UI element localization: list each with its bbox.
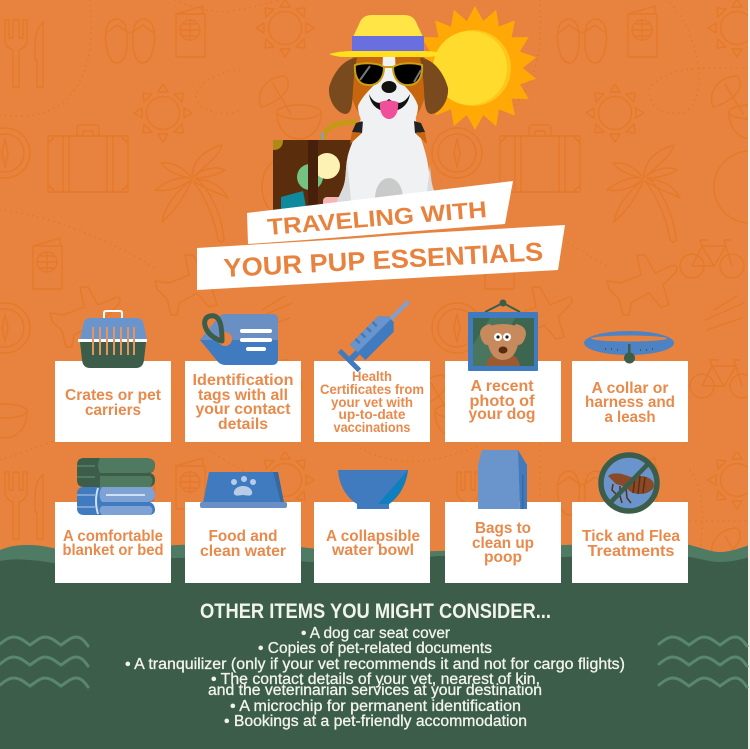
waves left bbox=[0, 637, 88, 687]
text: A collar or bbox=[592, 380, 668, 397]
panel: recent photo bbox=[445, 300, 561, 442]
panel: food and water bbox=[185, 472, 301, 583]
icon: suitcase bbox=[273, 122, 357, 212]
panel: blanket bbox=[55, 458, 171, 583]
banner: traveling with bbox=[247, 181, 513, 244]
title banner bbox=[197, 181, 565, 290]
banner: your pup essentials bbox=[197, 225, 565, 290]
panel: tick and flea bbox=[572, 455, 688, 583]
icon: pet crate bbox=[78, 311, 147, 368]
panel: food and water: clean water bbox=[200, 543, 286, 560]
text: Crates or pet bbox=[65, 387, 161, 404]
panel: poop bags: clean up bbox=[472, 535, 534, 552]
waves right bbox=[659, 637, 747, 687]
panel: identification tags: tags with all bbox=[198, 387, 288, 404]
panel: collapsible bowl: water bowl bbox=[331, 542, 414, 559]
dog body bbox=[333, 112, 442, 210]
nose bbox=[382, 81, 396, 93]
icon: collapsible bowl bbox=[338, 470, 408, 509]
panel: blanket: blanket or bed bbox=[62, 542, 164, 559]
text: Food and bbox=[208, 528, 278, 545]
panel: health certificates: your vet with bbox=[331, 395, 413, 410]
right edge strip bbox=[748, 0, 750, 749]
list: • Bookings at a pet-friendly accommodation bbox=[224, 713, 527, 730]
text: A collapsible bbox=[326, 528, 420, 545]
panel: crates: carriers bbox=[85, 402, 141, 419]
section: other items bbox=[125, 600, 625, 730]
icon: sun bbox=[412, 6, 538, 130]
panel: identification tags: details bbox=[218, 416, 268, 433]
dog head bbox=[350, 56, 427, 118]
icon: food bowl bbox=[200, 472, 287, 508]
panel: recent photo: your dog bbox=[468, 406, 536, 423]
mouth bbox=[369, 94, 410, 111]
panel: health certificates: vaccinations bbox=[334, 420, 410, 435]
panel: health certificates bbox=[314, 292, 430, 442]
list: • A dog car seat cover bbox=[301, 625, 450, 642]
text: A comfortable bbox=[63, 528, 163, 545]
tongue bbox=[380, 100, 398, 119]
sunglasses bbox=[355, 63, 422, 85]
icon: sun hat bbox=[329, 15, 443, 57]
panel: poop bags bbox=[445, 450, 561, 583]
text: Bags to bbox=[475, 520, 531, 537]
banner: your pup essentials: YOUR PUP ESSENTIALS bbox=[223, 236, 544, 283]
panel: recent photo: photo of bbox=[470, 393, 535, 410]
dog ears bbox=[329, 58, 448, 114]
dog muzzle bbox=[358, 56, 418, 126]
list: • The contact details of your vet, nearest of kin, bbox=[211, 671, 540, 688]
panel: identification tags: your contact bbox=[196, 401, 290, 418]
panel: poop bags: poop bbox=[484, 549, 522, 566]
banner: traveling with: TRAVELING WITH bbox=[266, 196, 488, 240]
panel: health certificates: up-to-date bbox=[338, 407, 406, 422]
green wave: light band bbox=[0, 542, 750, 749]
icon: collar bbox=[584, 331, 674, 364]
list: and the veterinarian services at your destination bbox=[208, 682, 542, 699]
green wave: dark ground bbox=[0, 555, 750, 749]
panel: tick and flea: Treatments bbox=[588, 543, 674, 560]
illustration: beagle dog bbox=[329, 56, 448, 218]
icon: bag bbox=[478, 450, 527, 509]
icon: syringe bbox=[338, 292, 418, 372]
text: Tick and Flea bbox=[582, 528, 680, 545]
list: • A microchip for permanent identification bbox=[230, 698, 521, 715]
panel: collar: harness and bbox=[585, 394, 675, 411]
panel: health certificates: Certificates from bbox=[320, 382, 424, 397]
panel: collapsible bowl bbox=[314, 470, 430, 583]
panel: collar: a leash bbox=[604, 409, 656, 426]
icon: id tag bbox=[200, 314, 278, 365]
text: Identification bbox=[192, 372, 294, 389]
panel: crates bbox=[55, 311, 171, 442]
heading: OTHER ITEMS YOU MIGHT CONSIDER... bbox=[200, 600, 551, 623]
panel: identification tags bbox=[185, 314, 301, 442]
text: Health bbox=[352, 369, 392, 384]
icon: framed dog photo bbox=[468, 300, 538, 371]
panel: collar bbox=[572, 331, 688, 442]
list bbox=[125, 625, 625, 730]
icon: no flea sign bbox=[601, 455, 657, 511]
icon: folded blankets bbox=[77, 458, 155, 515]
list: • Copies of pet-related documents bbox=[258, 640, 492, 657]
text: A recent bbox=[470, 378, 534, 395]
list: • A tranquilizer (only if your vet recommends it and not for cargo flights) bbox=[125, 656, 625, 673]
